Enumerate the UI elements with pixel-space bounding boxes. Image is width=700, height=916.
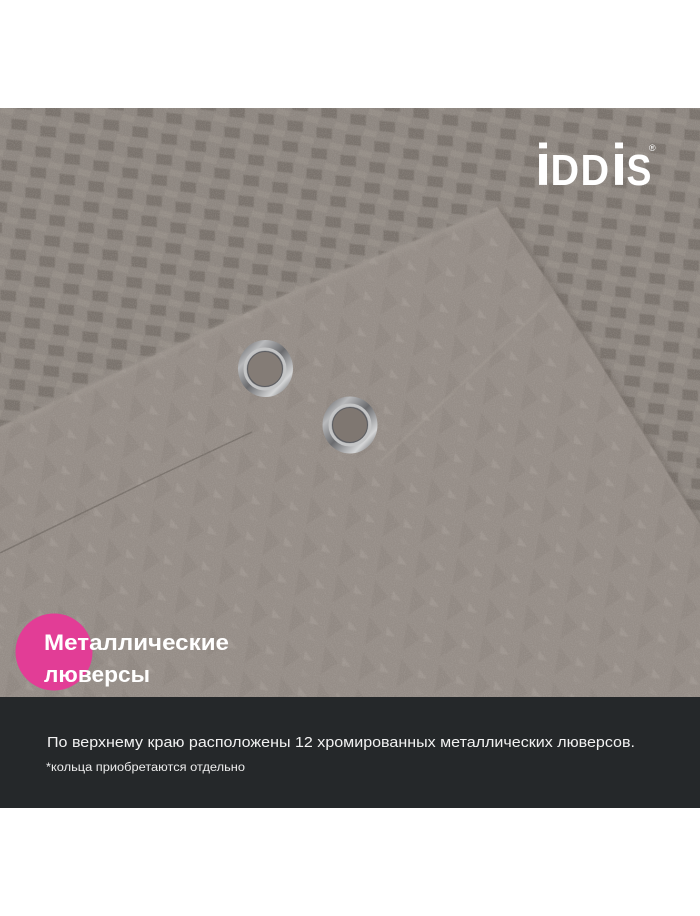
heading: люверсы xyxy=(44,662,150,687)
logo: IDDIS: D xyxy=(550,145,579,194)
logo: IDDIS xyxy=(535,133,656,198)
dark caption band xyxy=(0,697,700,808)
eyelet 2 xyxy=(322,396,378,454)
logo: IDDIS: S xyxy=(626,145,651,195)
photo: fabric curtain xyxy=(0,90,700,720)
logo: IDDIS: D xyxy=(580,145,609,194)
logo: IDDIS: ® xyxy=(649,143,656,153)
caption text: По верхнему краю расположены 12 хромированных металлических люверсов. xyxy=(47,734,635,751)
fabric grain xyxy=(0,108,700,697)
light fabric fold edge xyxy=(0,209,497,429)
logo: IDDIS: i xyxy=(535,133,551,198)
back fabric layer with checked weave xyxy=(0,108,700,524)
lower fold xyxy=(380,303,547,462)
heading: Металлические xyxy=(44,630,229,655)
front folded fabric layer xyxy=(0,207,700,720)
eyelet 1 xyxy=(238,340,293,397)
pink circle accent xyxy=(16,614,92,690)
hem seam xyxy=(0,432,252,553)
logo: IDDIS: i xyxy=(611,133,627,198)
shadow under front fabric xyxy=(497,207,700,535)
heading xyxy=(44,630,229,687)
footnote: *кольца приобретаются отдельно xyxy=(46,762,245,774)
